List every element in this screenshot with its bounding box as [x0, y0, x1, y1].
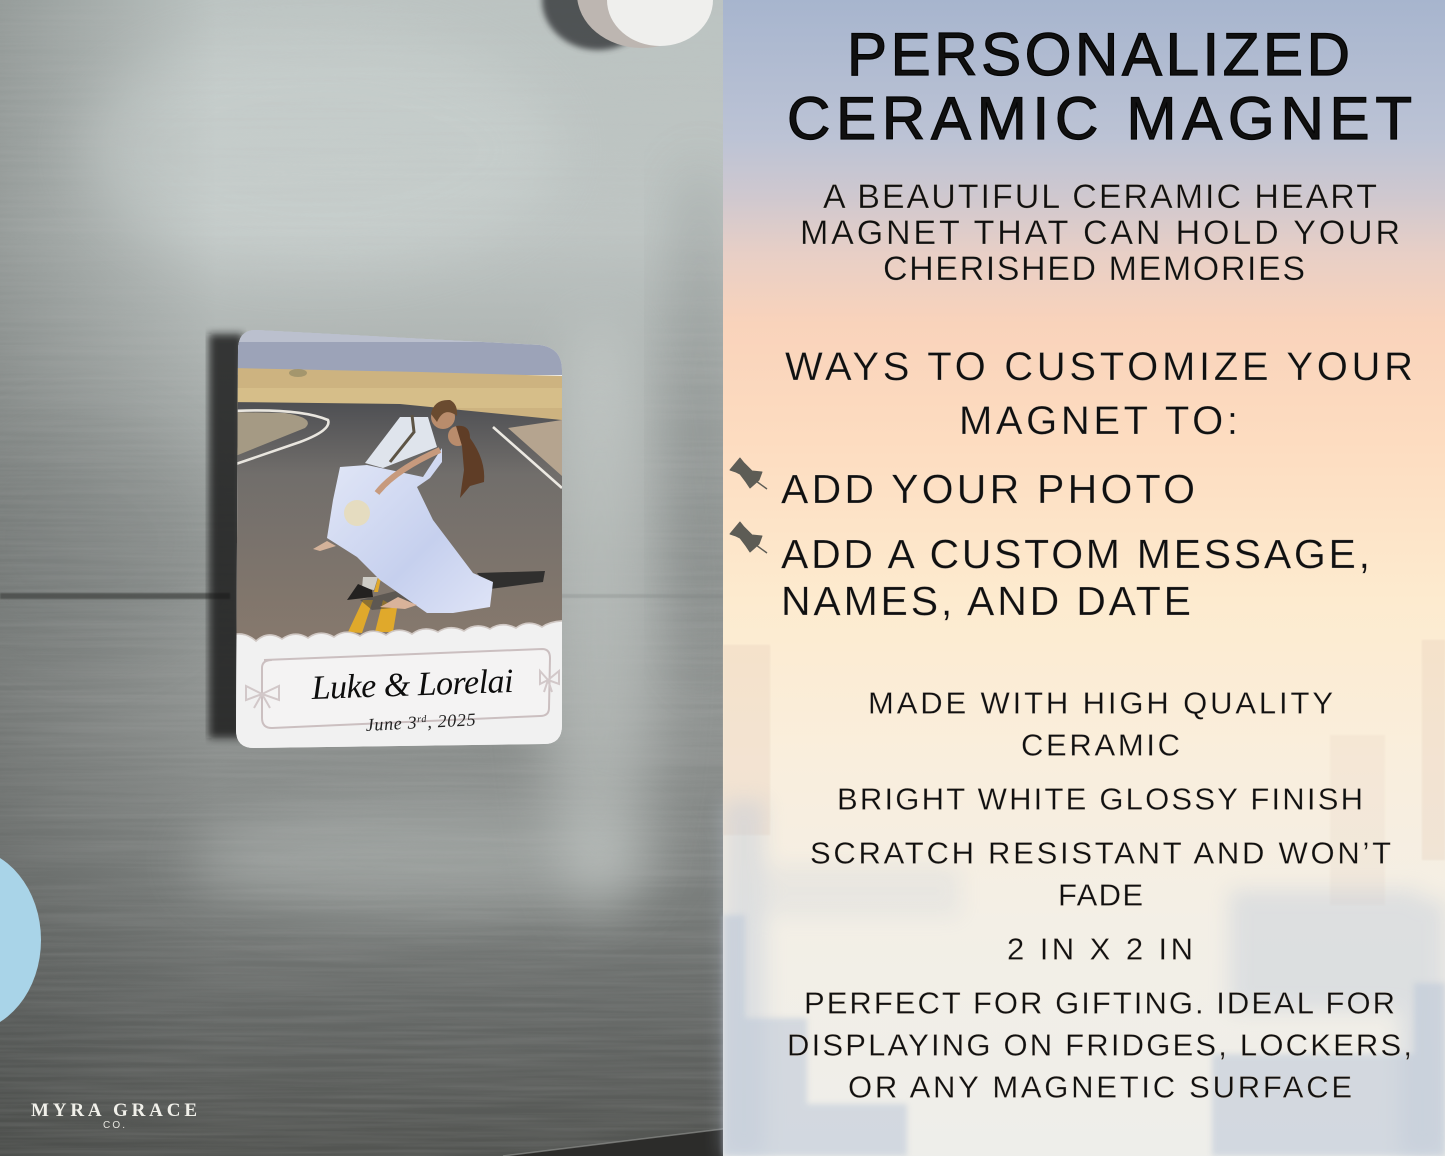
scalloped caption band: [230, 621, 570, 755]
customize heading: [785, 345, 1413, 443]
subtitle: CHERISHED MEMORIES: [883, 250, 1305, 288]
product details: BRIGHT WHITE GLOSSY FINISH: [837, 782, 1363, 816]
product details: SCRATCH RESISTANT AND WON’T: [810, 836, 1391, 870]
icon: push pin 1: [730, 458, 767, 489]
brand logo: CO.: [103, 1120, 125, 1131]
customize option: message: ADD A CUSTOM MESSAGE,: [781, 531, 1370, 577]
brand logo: MYRA GRACE: [31, 1100, 197, 1121]
names caption: rd: [417, 714, 428, 725]
subtitle: MAGNET THAT CAN HOLD YOUR: [800, 214, 1400, 252]
product details: OR ANY MAGNETIC SURFACE: [848, 1070, 1352, 1104]
customize heading: MAGNET TO:: [959, 399, 1238, 443]
names caption: June 3: [365, 712, 417, 735]
product details: [787, 686, 1412, 1104]
photo magnet: [230, 325, 570, 755]
subtitle: A BEAUTIFUL CERAMIC HEART: [823, 178, 1377, 216]
bow ornaments: [246, 671, 559, 708]
customize option: message: [781, 531, 1370, 624]
icon: round white fridge magnet at top: [542, 0, 713, 50]
title: CERAMIC MAGNET: [787, 85, 1412, 152]
panel: stainless steel fridge photo: [0, 0, 728, 1156]
panel: watercolor sky background: [723, 0, 1445, 1156]
names caption: Luke & Lorelai: [310, 663, 514, 707]
product details: PERFECT FOR GIFTING. IDEAL FOR: [804, 986, 1395, 1020]
product details: FADE: [1058, 878, 1143, 912]
customize option: message: NAMES, AND DATE: [781, 578, 1191, 624]
product details: 2 IN X 2 IN: [1007, 932, 1193, 966]
icon: push pin 2: [730, 522, 767, 553]
customize heading: WAYS TO CUSTOMIZE YOUR: [785, 345, 1413, 389]
product details: MADE WITH HIGH QUALITY: [868, 686, 1333, 720]
names caption: [312, 669, 512, 731]
product details: DISPLAYING ON FRIDGES, LOCKERS,: [787, 1028, 1412, 1062]
bride: [327, 448, 493, 613]
product details: CERAMIC: [1021, 728, 1180, 762]
title: [787, 21, 1412, 152]
wedding photo: [230, 325, 570, 645]
subtitle: [800, 178, 1400, 288]
icon: round blue fridge magnet at left edge: [0, 848, 41, 1032]
magnet shadow: [209, 334, 243, 738]
title: PERSONALIZED: [847, 21, 1350, 88]
names caption: , 2025: [427, 709, 476, 732]
groom: [365, 417, 437, 468]
customize option: photo: ADD YOUR PHOTO: [781, 466, 1195, 512]
brand logo: [31, 1100, 197, 1131]
